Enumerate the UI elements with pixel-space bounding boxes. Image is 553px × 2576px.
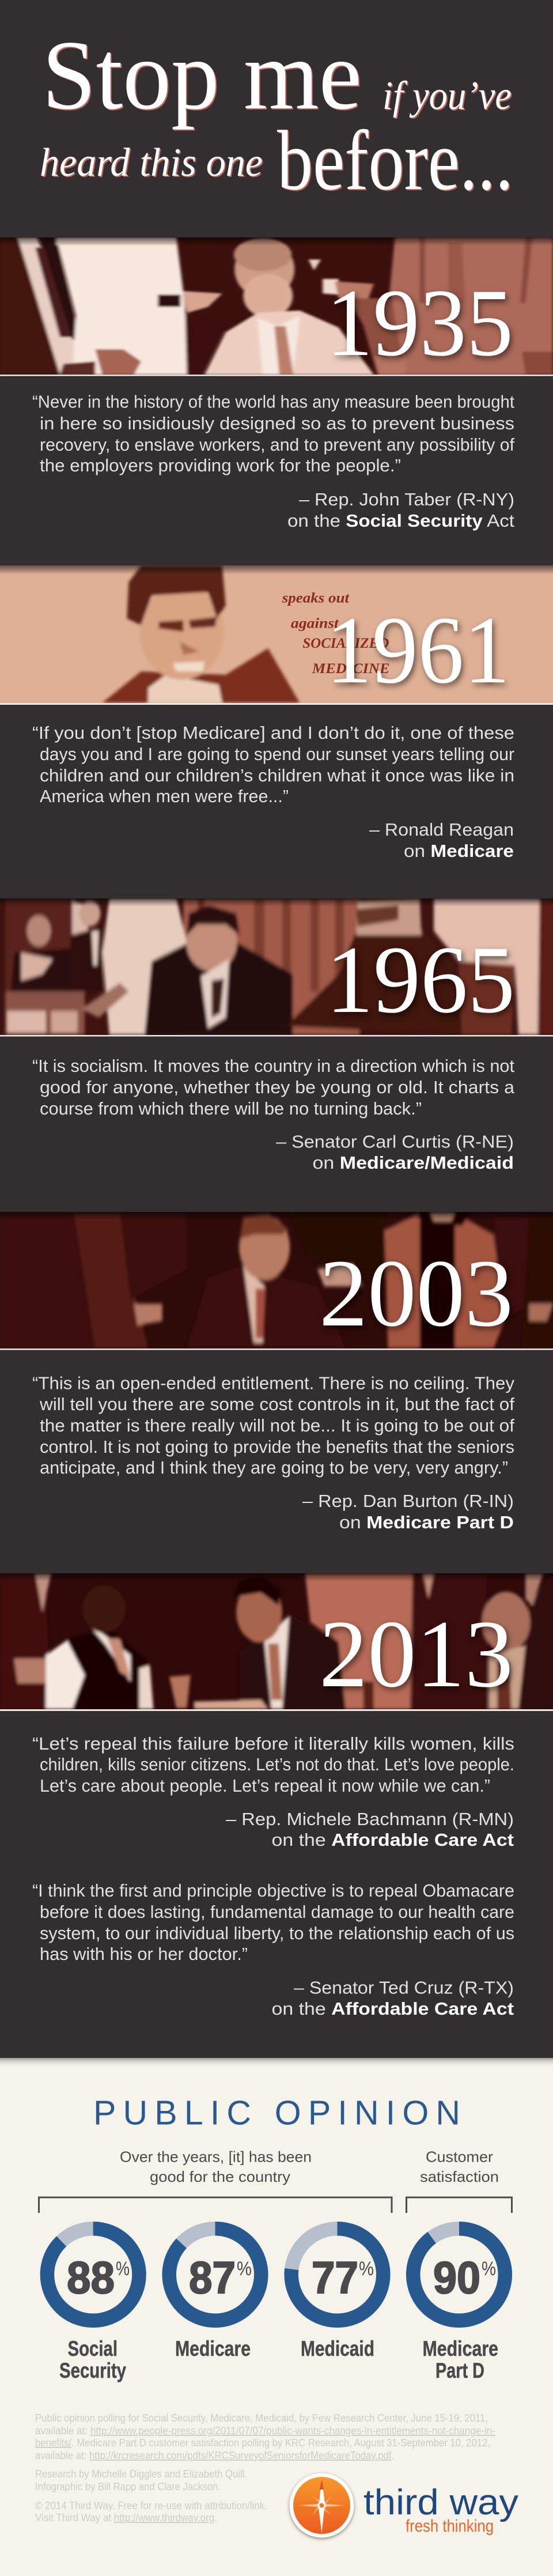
quote: John Taber: in here so insidiously designed so as to prevent business [40,413,514,433]
quote: Dan Burton: control. It is not going to provide the benefits that the seniors [40,1437,514,1457]
copyright text [35,2500,267,2524]
quote: Michele Bachmann: on the Affordable Care Act [272,1830,514,1850]
subheading: customer satisfaction: satisfaction [420,2168,499,2185]
label: Medicare: Medicare [175,2337,251,2360]
quote: Ted Cruz: “I think the first and principle objective is to repeal Obamacare [32,1880,514,1901]
donut: Medicaid 77%: 77 [312,2252,358,2303]
title: heard this one [40,141,263,185]
quote: Dan Burton: – Rep. Dan Burton (R-IN) [302,1491,514,1511]
heading: public opinion: PUBLIC OPINION [93,2094,460,2132]
logo: wordmark [363,2483,518,2536]
donut: Social Security 88%: 88 [67,2252,115,2303]
donut: Medicare Part D 90%: % [482,2258,496,2280]
donut: Medicare 87%: 87 [189,2252,236,2303]
donut: Medicare Part D 90% [413,2228,505,2321]
quote: Dan Burton: will tell you there are some cost controls in it, but the fact of [39,1394,514,1414]
logo: wordmark: third way [363,2483,518,2522]
quote: Dan Burton: “This is an open-ended entitlement. There is no ceiling. They [32,1373,514,1393]
copyright text: © 2014 Third Way. Free for re-use with attribution/link. [35,2500,267,2511]
quote: Dan Burton [32,1373,514,1532]
subheading: customer satisfaction [420,2148,499,2185]
quote: Ronald Reagan: days you and I are going to spend our sunset years telling our [40,744,514,764]
photo: 1961 Reagan: MEDICINE [312,660,389,677]
quote: Michele Bachmann [32,1733,514,1850]
photo: 1961 Reagan: speaks out [282,590,350,606]
subheading: customer satisfaction: Customer [426,2148,493,2166]
quote: Carl Curtis: “It is socialism. It moves the country in a direction which is not [32,1056,514,1076]
quote: Michele Bachmann: Let’s care about people. Let’s repeal it now while we can.” [40,1776,490,1796]
quote: John Taber: the employers providing work for the people.” [40,455,401,475]
sources text: available at: http://www.people-press.org/2011/07/07/public-wants-changes-in-entitlements-not-change-in- [35,2425,495,2437]
quote: Carl Curtis [32,1056,515,1173]
sources text: Public opinion polling for Social Security, Medicare, Medicaid, by Pew Research Center, June 15-19, 2011, [35,2412,488,2424]
photo: 2003 signing [0,1212,553,1349]
quote: Michele Bachmann: “Let’s repeal this failure before it literally kills women, kills [32,1733,514,1754]
dark background panel [0,0,553,2058]
panel: 1935 [0,237,553,376]
label: Social Security [59,2337,126,2382]
panel: 2003 [0,1212,553,1349]
photo: 1961 Reagan [0,565,553,703]
donut: Medicare 87% [169,2228,261,2321]
panel: 1965 [0,898,553,1035]
title: before... [277,114,513,208]
label: Medicare Part D: Part D [435,2359,484,2382]
subheading: good for the country: Over the years, [it] has been [120,2148,312,2166]
panel: 2013 [0,1573,553,1709]
quote: Ted Cruz: system, to our individual liberty, to the relationship each of us [40,1923,514,1943]
credits text: Infographic by Bill Rapp and Clare Jackson. [35,2481,221,2492]
credits text: Research by Michelle Diggles and Elizabeth Quill. [35,2468,247,2480]
photo: 1965 signing [0,898,553,1035]
donut: Social Security 88% [47,2228,139,2321]
photo: 1961 Reagan: against [291,615,339,631]
photo: 1961 Reagan: SOCIALIZED [302,635,389,651]
sources text [35,2412,495,2461]
year: 2003: 2003 [319,1240,513,1347]
year: 1935: 1935 [326,270,513,376]
year: 2013: 2013 [319,1601,513,1708]
quote: Ronald Reagan: – Ronald Reagan [369,819,514,840]
photo: 2013 signing [0,1573,553,1709]
label: Social Security: Security [59,2359,126,2382]
title: Stop me [42,21,362,130]
shadow under dark panel [0,2058,553,2067]
quote: Carl Curtis: – Senator Carl Curtis (R-NE) [276,1132,514,1151]
year: 1965: 1965 [326,927,515,1033]
quote: John Taber: – Rep. John Taber (R-NY) [299,489,514,509]
donut: Medicaid 77%: % [359,2258,374,2280]
logo: compass icon [289,2473,354,2538]
subheading: good for the country [120,2148,312,2185]
photo: 1935 signing [0,237,553,375]
subheading: good for the country: good for the country [150,2168,290,2185]
quote: Ronald Reagan [32,723,514,861]
bracket: three programs [39,2197,392,2213]
quote: Carl Curtis: course from which there will be no turning back.” [40,1098,422,1119]
quote: Ted Cruz: before it does lasting, fundamental damage to our health care [40,1902,514,1922]
year: 1961: 1961 [326,597,510,704]
quote: John Taber: recovery, to enslave workers, and to prevent any possibility of [40,435,514,455]
photo rule 1965 [0,1035,553,1036]
quote: Dan Burton: on Medicare Part D [339,1512,514,1532]
title: if you’ve [382,74,512,118]
quote: John Taber [32,392,514,531]
quote: Ted Cruz: has with his or her doctor.” [40,1944,248,1964]
title [40,21,513,208]
quote: Ronald Reagan: “If you don’t [stop Medicare] and I don’t do it, one of these [32,723,514,743]
photo rule 1935 [0,375,553,376]
donut: Social Security 88%: % [116,2258,130,2280]
label: Medicare Part D [423,2337,498,2382]
quote: Ted Cruz: – Senator Ted Cruz (R-TX) [294,1978,514,1997]
sources text: available at: http://krcresearch.com/pdfs/KRCSurveyofSeniorsforMedicareToday.pdf. [35,2450,394,2461]
quote: Michele Bachmann: – Rep. Michele Bachmann (R-MN) [226,1809,514,1829]
quote: Ronald Reagan: America when men were free...” [40,786,289,806]
quote: Carl Curtis: good for anyone, whether they be young or old. It charts a [40,1077,515,1097]
donut: Medicaid 77% [291,2228,383,2321]
logo: wordmark: fresh thinking [406,2517,494,2536]
quote: Carl Curtis: on Medicare/Medicaid [312,1153,514,1173]
label: Medicaid: Medicaid [301,2337,374,2360]
quote: Ted Cruz: on the Affordable Care Act [272,1999,514,2019]
quote: Ronald Reagan: on Medicare [404,841,514,861]
photo rule 1961 [0,703,553,705]
sources text: benefits/. Medicare Part D customer satisfaction polling by KRC Research, August 31-September 10, 2012, [35,2437,490,2449]
credits text [35,2468,247,2492]
bracket: part D [407,2197,512,2213]
quote: Dan Burton: anticipate, and I think they are going to be very, very angry.” [40,1457,508,1478]
quote: John Taber: “Never in the history of the world has any measure been brought [32,392,514,411]
donut: Medicare 87%: % [237,2258,252,2280]
panel: 1961 [0,565,553,704]
quote: Ronald Reagan: children and our children’s children what it once was like in [40,765,514,785]
cream background panel [0,2058,553,2576]
copyright text: Visit Third Way at http://www.thirdway.org. [35,2512,217,2524]
quote: John Taber: on the Social Security Act [287,511,514,531]
quote: Michele Bachmann: children, kills senior citizens. Let’s not do that. Let’s love people. [40,1754,514,1774]
photo rule 2013 [0,1709,553,1711]
quote: Dan Burton: the matter is there really will not be... It is going to be out of [40,1415,514,1436]
quote: Ted Cruz [32,1880,514,2019]
label: Medicare Part D: Medicare [423,2337,498,2360]
photo rule 2003 [0,1349,553,1350]
donut: Medicare Part D 90%: 90 [433,2252,480,2303]
label: Social Security: Social [68,2337,118,2360]
